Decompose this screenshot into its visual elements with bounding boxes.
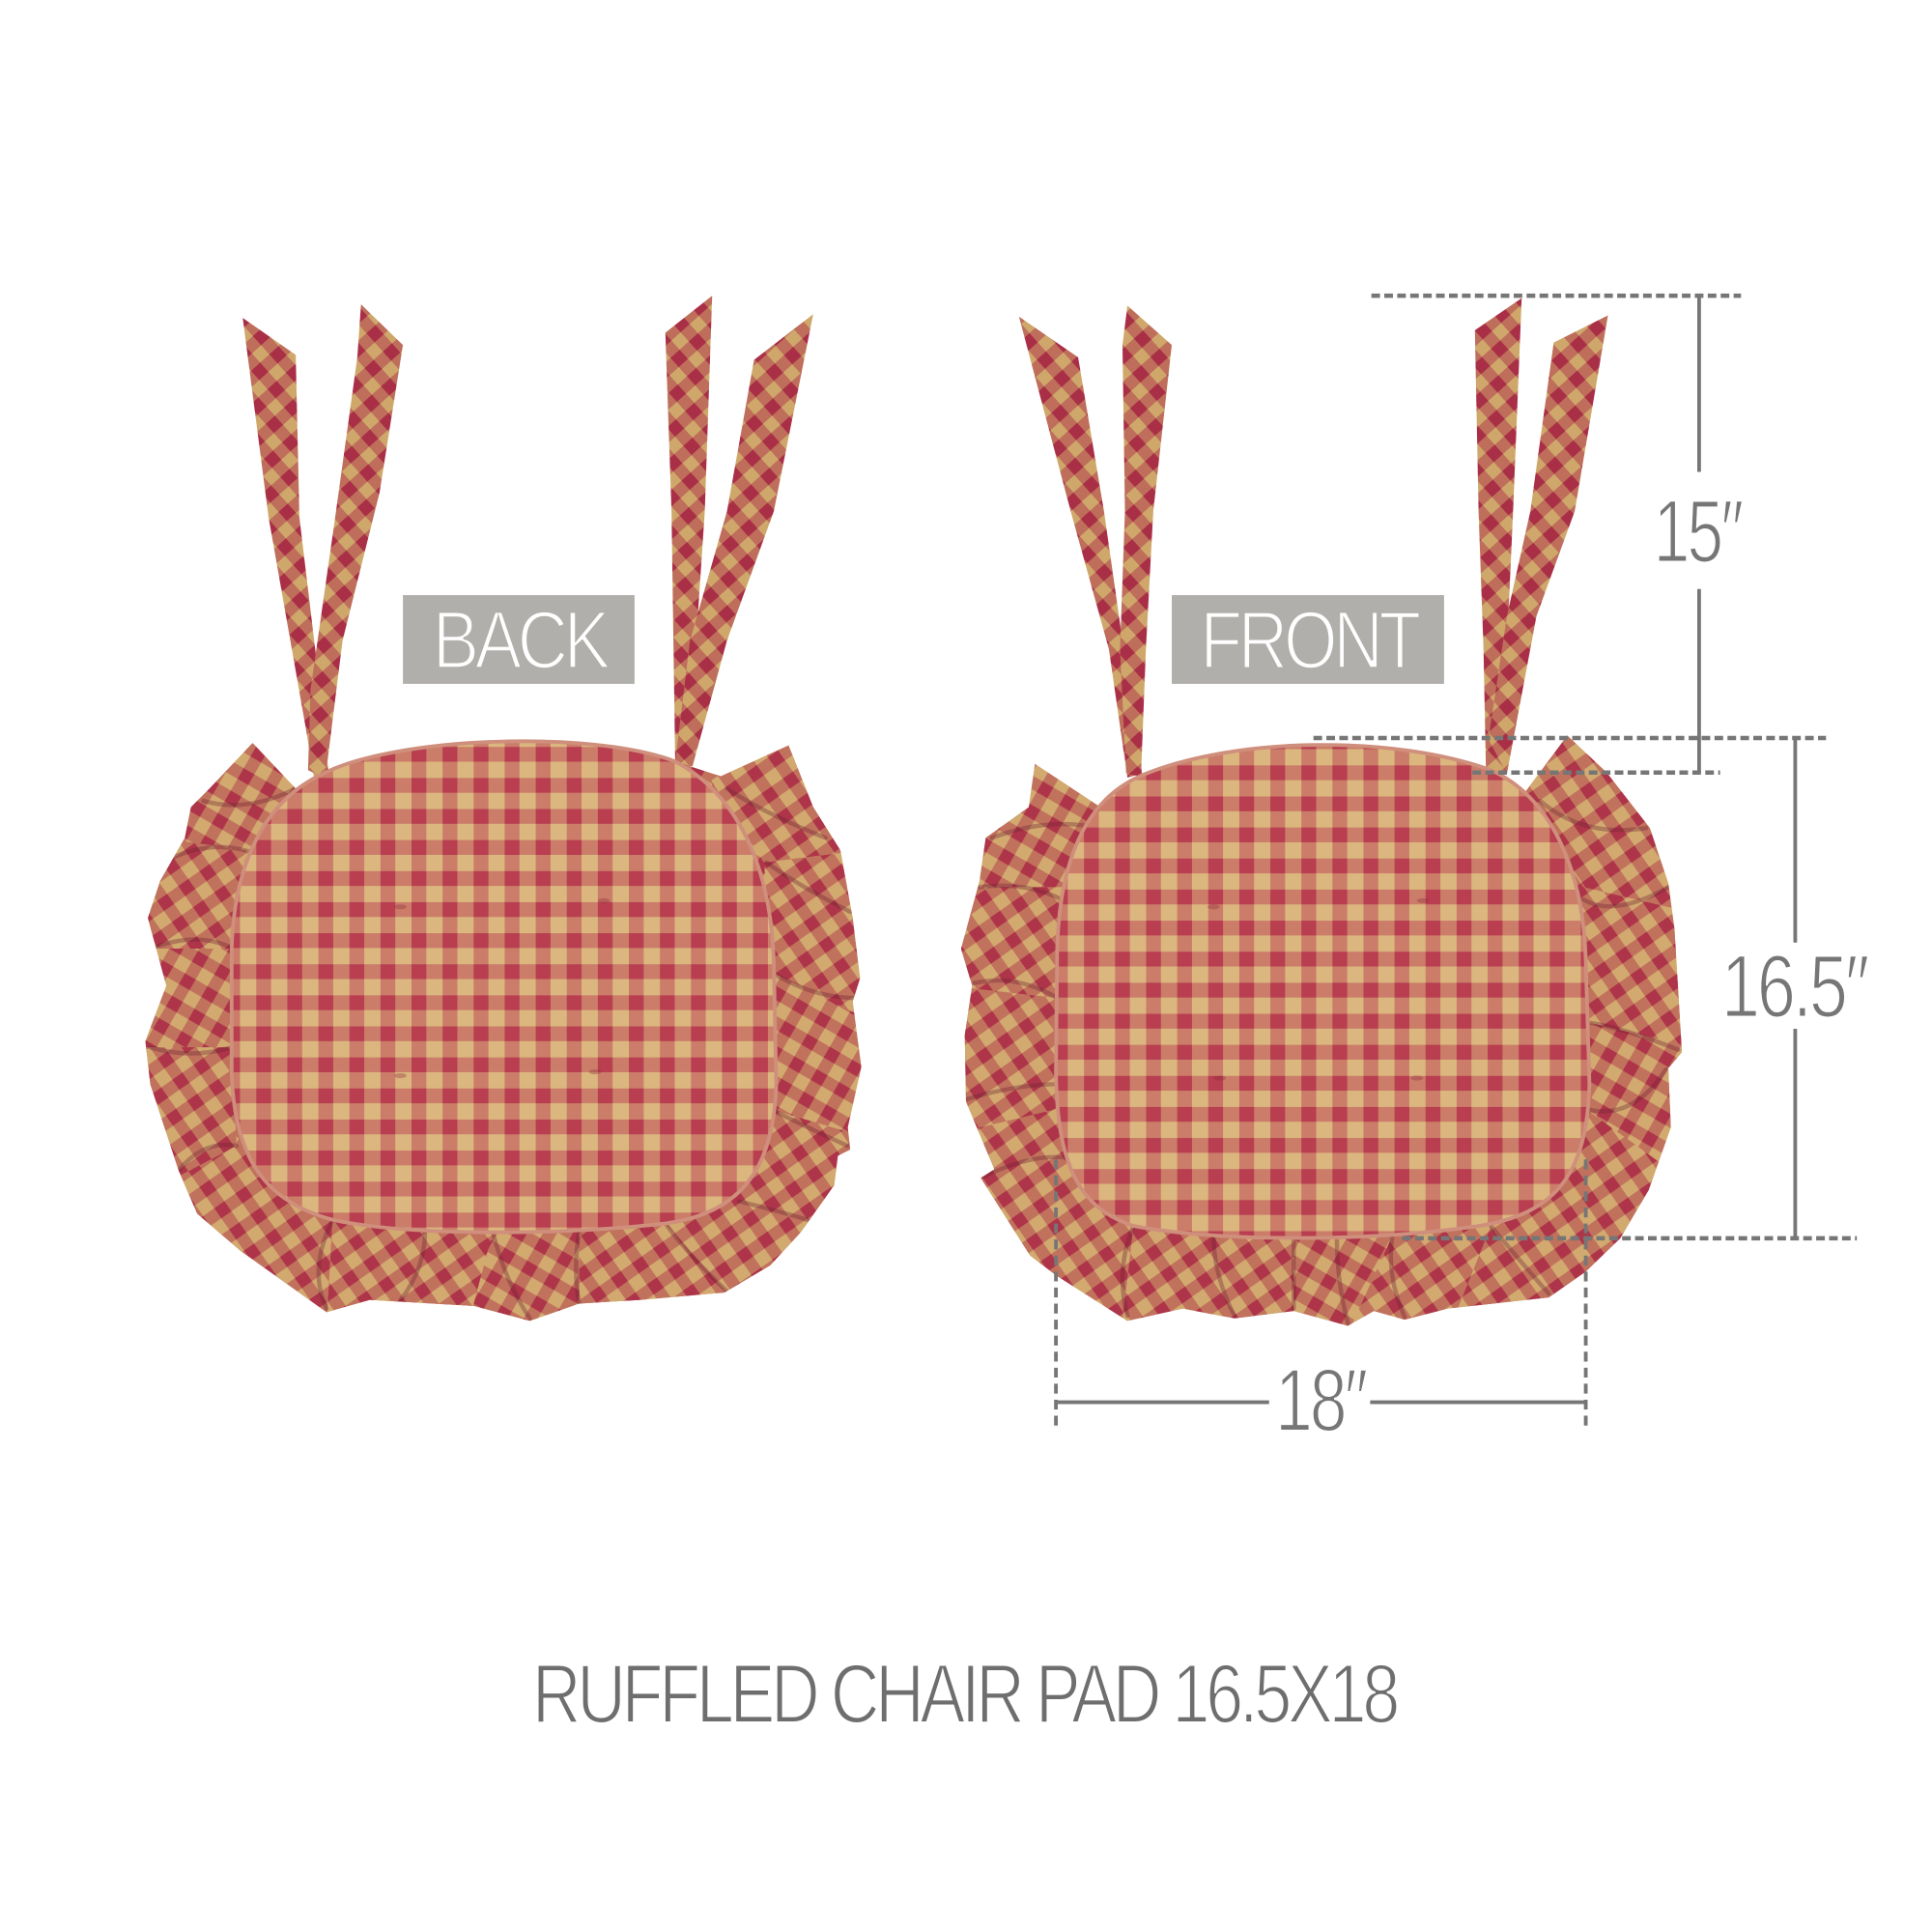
front ties left [1019,305,1172,778]
back ruffle [145,743,862,1321]
back cushion [232,741,777,1233]
back tufts [394,898,610,1078]
dimension: pad height 16.5 inches: 16.5″ [1721,937,1868,1036]
chair pad: front view [949,298,1700,1343]
infographic canvas [145,294,1867,1722]
front tufts [1208,898,1430,1081]
front ruffle folds [967,801,1678,1323]
label: BACK: BACK [433,594,611,685]
title: RUFFLED CHAIR PAD 16.5X18 [532,1647,1398,1741]
front cushion [1056,745,1589,1238]
chair pad: back view [124,296,887,1343]
label: FRONT: FRONT [1200,594,1420,685]
front ruffle [949,727,1700,1343]
dimension: pad width 18 inches: 18″ [1275,1351,1367,1450]
dimension: tie length 15 inches: 15″ [1654,483,1743,582]
back ties left [242,304,403,779]
back ruffle folds [151,788,858,1319]
back ties right [666,296,813,766]
front ties right [1475,298,1608,774]
